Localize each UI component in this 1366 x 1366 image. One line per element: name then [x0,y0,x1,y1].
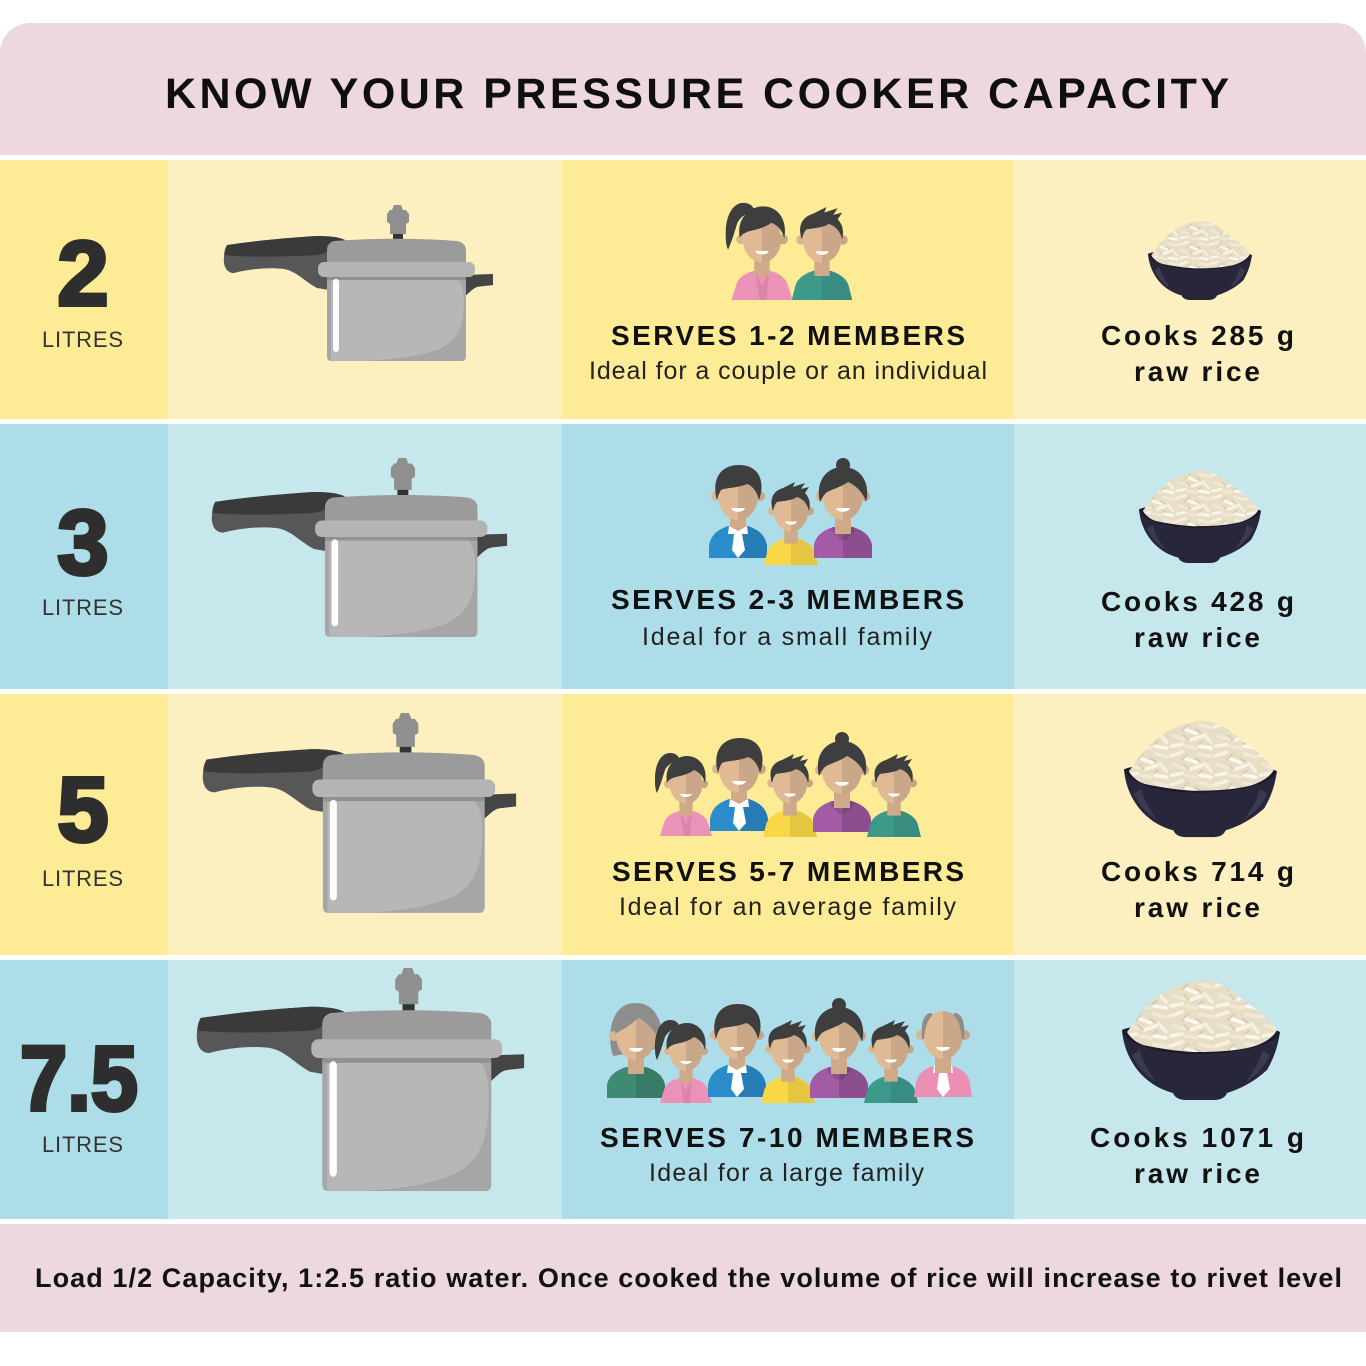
capacity unit: LITRES [42,327,123,352]
capacity unit: LITRES [42,1132,123,1157]
rice quantity [1090,1122,1304,1189]
icon: three people [709,458,872,565]
rice quantity: raw rice [1134,622,1260,653]
rice quantity: Cooks 285 g [1101,320,1294,351]
icon: seven people [607,998,972,1103]
icon: rice bowl extra large [1122,980,1280,1100]
panel: footer band [0,1224,1366,1332]
icon: rice bowl small [1148,221,1252,300]
capacity unit: LITRES [42,595,123,620]
rice quantity: raw rice [1134,356,1260,387]
serves heading: SERVES 1-2 MEMBERS [611,320,965,351]
rice quantity [1101,320,1294,387]
icon: 3 litre pressure cooker [212,458,507,637]
capacity unit: LITRES [42,866,123,891]
serves heading: SERVES 5-7 MEMBERS [612,856,964,887]
rice quantity [1101,586,1294,653]
serves heading: SERVES 7-10 MEMBERS [600,1122,974,1153]
icon: 7.5 litre pressure cooker [197,968,524,1191]
icon: 5 litre pressure cooker [203,713,516,913]
serves description: Ideal for a small family [642,623,932,651]
icon: 2 litre pressure cooker [224,205,493,361]
icon: rice bowl medium [1139,471,1261,563]
capacity number: 3: 3 [57,492,109,594]
serves description: Ideal for a large family [649,1159,924,1187]
icon: two people [726,203,852,300]
panel: header band [0,23,1366,155]
rice quantity: Cooks 1071 g [1090,1122,1304,1153]
rice quantity: Cooks 428 g [1101,586,1294,617]
rice quantity: raw rice [1134,1158,1260,1189]
panel: row 3 litres [0,424,1366,689]
serves description: Ideal for a couple or an individual [589,357,987,385]
icon: rice bowl large [1124,721,1277,837]
panel: row 7.5 litres [0,960,1366,1219]
capacity number: 7.5: 7.5 [20,1028,138,1130]
panel: row 2 litres [0,160,1366,419]
icon: five people [655,732,921,837]
serves heading: SERVES 2-3 MEMBERS [611,584,964,615]
rice quantity [1101,856,1294,923]
capacity number: 2: 2 [57,223,109,325]
rice quantity: Cooks 714 g [1101,856,1294,887]
serves description: Ideal for an average family [619,893,956,921]
rice quantity: raw rice [1134,892,1260,923]
capacity number: 5: 5 [57,759,109,861]
footer note: Load 1/2 Capacity, 1:2.5 ratio water. Once cooked the volume of rice will increase to rivet level [35,1263,1342,1293]
title: KNOW YOUR PRESSURE COOKER CAPACITY [165,70,1229,118]
panel: row 5 litres [0,694,1366,955]
